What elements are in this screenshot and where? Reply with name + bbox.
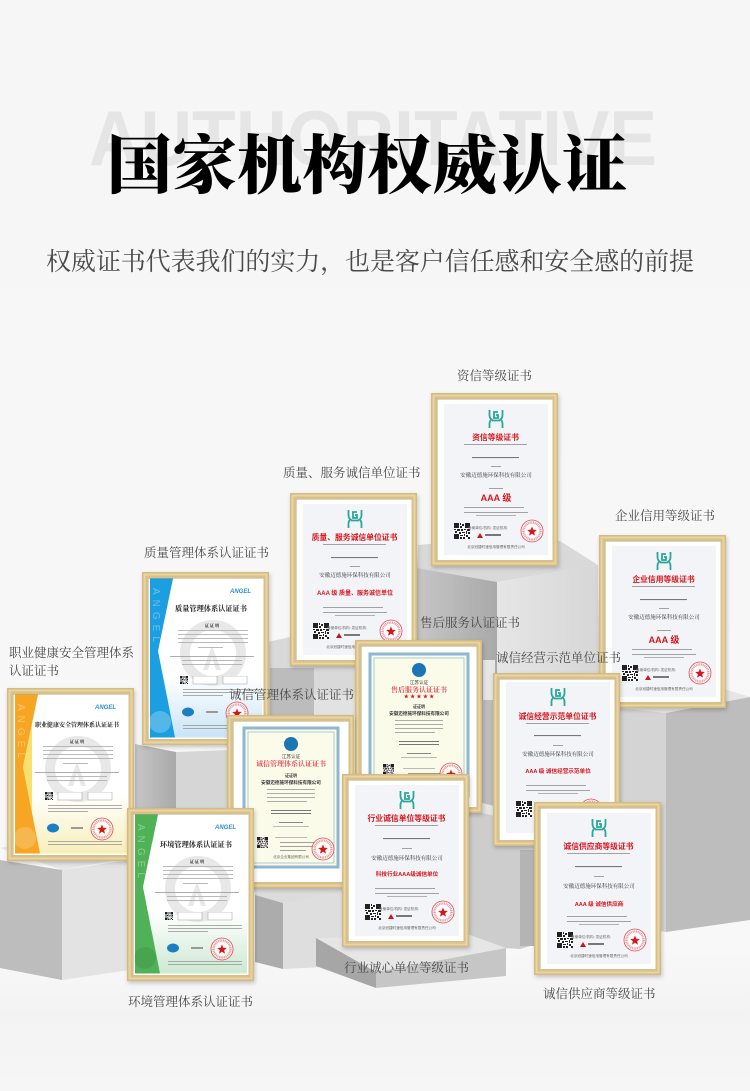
certificate: 质量、服务诚信单位证书: 安徽迈德施环保科技有限公司 (319, 571, 391, 579)
certificate: 质量、服务诚信单位证书: 北京冠捷时速信用管理有限责任公司 (326, 644, 384, 649)
certificate: 职业健康安全管理体系认证证书: 证 证 明 (70, 738, 84, 744)
label: 质量管理体系认证证书: 质量管理体系认证证书 (144, 545, 270, 560)
certificate: 资信等级证书: 北京冠捷时速信用管理有限责任公司 (467, 544, 525, 549)
certificate: 行业诚信单位等级证书: 安徽迈德施环保科技有限公司 (371, 854, 443, 862)
certificate: 诚信管理体系认证证书: 安徽迈德施环保科技有限公司 (261, 779, 321, 786)
label: 售后服务认证证书: 售后服务认证证书 (420, 615, 521, 630)
watermark: AUTHORITATIVE: AUTHORITATIVE (89, 94, 657, 182)
certificate: 质量管理体系认证证书: 证 证 明 (205, 622, 219, 628)
certificate: 质量、服务诚信单位证书: AAA 级 质量、服务诚信单位 (317, 589, 393, 597)
certificate: 售后服务认证证书: 江苏认证 (410, 679, 429, 686)
certificate: 行业诚信单位等级证书: 行业诚信单位等级证书 (368, 813, 446, 823)
label: 诚信经营示范单位证书: 诚信经营示范单位证书 (496, 650, 622, 665)
certificate: 环境管理体系认证证书: 环境管理体系认证证书 (160, 840, 233, 849)
certificate: 行业诚信单位等级证书 (342, 774, 469, 947)
certificate: 职业健康安全管理体系认证证书 (7, 688, 134, 861)
certificate: 企业信用等级证书: 备案单位/机构: 发证机构: (636, 667, 676, 672)
label: 企业信用等级证书: 企业信用等级证书 (615, 508, 716, 523)
label: 诚信供应商等级证书: 诚信供应商等级证书 (543, 986, 656, 1001)
certificate: 职业健康安全管理体系认证证书: ANGEL (94, 705, 116, 711)
certificate: 企业信用等级证书: AAA 级 (649, 634, 679, 645)
certificate: 诚信供应商等级证书: 备案单位/机构: 发证机构: (571, 934, 611, 939)
certificate: 诚信经营示范单位证书: 安徽迈德施环保科技有限公司 (522, 750, 594, 758)
label: 环境管理体系认证证书: 环境管理体系认证证书 (128, 994, 254, 1009)
certificate: 诚信供应商等级证书: AAA 级 诚信供应商 (575, 900, 624, 908)
title: 国家机构权威认证 (107, 131, 627, 202)
cube under 质量管理 certificate (135, 744, 230, 812)
certificate: 质量管理体系认证证书 (142, 572, 269, 745)
label: 行业诚心单位等级证书: 行业诚心单位等级证书 (344, 960, 470, 975)
label: 资信等级证书: 资信等级证书 (457, 368, 533, 383)
certificate: 诚信经营示范单位证书: 诚信经营示范单位证书 (519, 711, 597, 721)
certificate: 职业健康安全管理体系认证证书: 职业健康安全管理体系认证证书 (35, 721, 120, 729)
certificate: 诚信管理体系认证证书: 证证明 (285, 772, 297, 778)
certificate: 企业信用等级证书 (599, 535, 726, 708)
label: 质量、服务诚信单位证书: 质量、服务诚信单位证书 (283, 465, 421, 480)
certificate: 质量、服务诚信单位证书: 备案单位/机构: 发证机构: (327, 625, 367, 630)
subtitle: 权威证书代表我们的实力，也是客户信任感和安全感的前提 (46, 248, 694, 276)
large cube right (620, 690, 750, 932)
certificate: 售后服务认证证书: 售后服务认证证书 (391, 685, 448, 694)
certificate: 诚信管理体系认证证书: 诚信管理体系认证证书 (256, 759, 327, 768)
cube behind 售后 and 诚信经营 certificates (470, 660, 500, 810)
certificate: 质量、服务诚信单位证书 (290, 493, 417, 666)
background: display cubes (0, 540, 750, 988)
cube behind 供应商 certificate (469, 800, 536, 949)
certificate: 质量、服务诚信单位证书: 质量、服务诚信单位证书 (312, 532, 398, 542)
certificate: 质量管理体系认证证书: ANGEL (150, 588, 161, 647)
certificate: 职业健康安全管理体系认证证书: ANGEL (15, 704, 26, 763)
cube bottom middle (254, 880, 345, 969)
certificate: 诚信供应商等级证书 (534, 802, 661, 975)
certificate: 诚信经营示范单位证书: AAA 级 诚信经营示范单位 (525, 767, 591, 775)
certificate: 行业诚信单位等级证书: 北京冠捷时速信用管理有限责任公司 (378, 925, 436, 930)
certificate: 售后服务认证证书: ★ ★ ★ ★ ★ (404, 694, 434, 700)
certificate: 售后服务认证证书: 安徽迈德施环保科技有限公司 (389, 710, 449, 717)
label: 职业健康安全管理体系认证证书: 认证证书 (9, 663, 60, 678)
certificate: 资信等级证书: AAA 级 (481, 492, 511, 503)
certificate: 诚信管理体系认证证书: 江苏认证 (282, 753, 301, 760)
certificate: 诚信管理体系认证证书 (227, 715, 354, 888)
certificate: 质量管理体系认证证书: 质量管理体系认证证书 (175, 604, 248, 613)
certificate: 行业诚信单位等级证书: 备案单位/机构: 发证机构: (379, 906, 419, 911)
certificate: 售后服务认证证书: 证证明 (413, 703, 425, 709)
label: 诚信管理体系认证证书: 诚信管理体系认证证书 (229, 687, 355, 702)
certificate: 售后服务认证证书 (355, 640, 482, 813)
certificate: 资信等级证书 (431, 393, 558, 566)
label: 职业健康安全管理体系认证证书: 职业健康安全管理体系 (9, 645, 135, 660)
certificate: 资信等级证书: 资信等级证书 (472, 432, 519, 442)
certificate: 诚信经营示范单位证书 (493, 673, 620, 846)
certificate: 诚信供应商等级证书: 北京冠捷时速信用管理有限责任公司 (570, 953, 628, 958)
certificate: 资信等级证书: 备案单位/机构: 发证机构: (468, 525, 508, 530)
certificate: 环境管理体系认证证书 (127, 808, 254, 981)
certificate: 环境管理体系认证证书: ANGEL (214, 825, 236, 831)
certificate: 企业信用等级证书: 北京冠捷时速信用管理有限责任公司 (635, 686, 693, 691)
cube behind 质量服务 certificate (268, 637, 356, 716)
certificate: 诚信供应商等级证书: 诚信供应商等级证书 (563, 841, 634, 851)
certificate: 环境管理体系认证证书: ANGEL (135, 824, 146, 883)
certificate: 诚信管理体系认证证书: 北京企业集团有限公司 (273, 854, 309, 859)
certificate: 企业信用等级证书: 安徽迈德施环保科技有限公司 (628, 613, 700, 621)
certificate: 行业诚信单位等级证书: 科技行业AAA级诚信单位 (376, 870, 439, 878)
certificate: 资信等级证书: 安徽迈德施环保科技有限公司 (460, 471, 532, 479)
cube behind 资信 certificate (417, 540, 600, 720)
large cube bottom left (0, 840, 130, 980)
certificate: 诚信供应商等级证书: 安徽迈德施环保科技有限公司 (563, 882, 635, 890)
certificate: 环境管理体系认证证书: 证 证 明 (190, 858, 204, 864)
certificate: 企业信用等级证书: 企业信用等级证书 (632, 574, 695, 584)
low step in front of 行业 certificate (316, 935, 506, 988)
certificate: 质量管理体系认证证书: ANGEL (229, 589, 251, 595)
